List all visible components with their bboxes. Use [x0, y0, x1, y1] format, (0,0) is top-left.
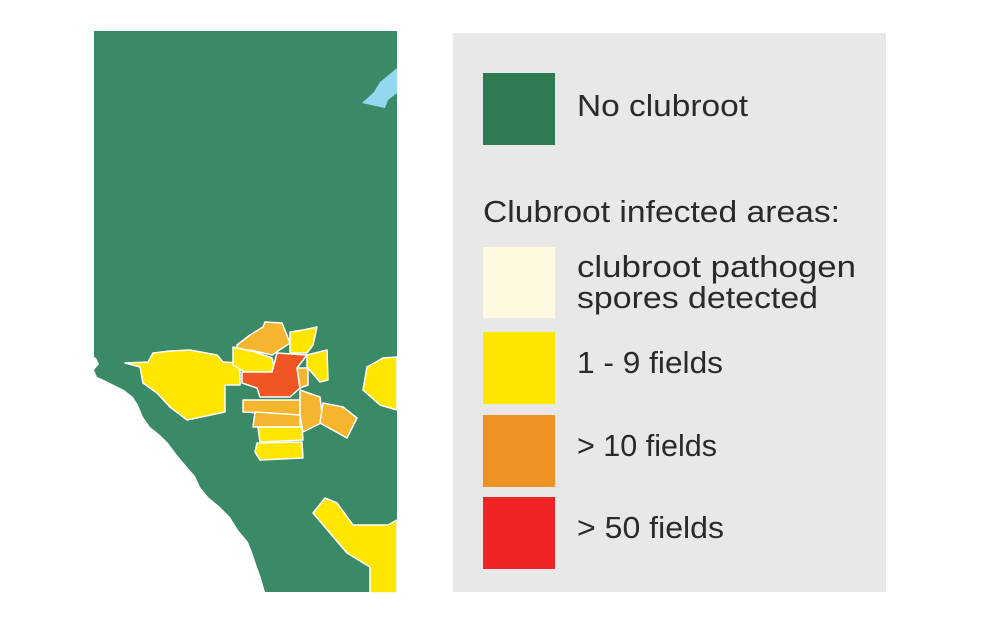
map: yellow W	[233, 347, 275, 372]
map: east yellow	[363, 357, 397, 410]
legend: >10 fields	[483, 415, 717, 487]
legend: >50 fields: > 50 fields	[577, 510, 724, 545]
legend: spores	[483, 247, 856, 318]
map: red core	[242, 353, 307, 397]
legend: spores: clubroot pathogen	[577, 249, 856, 284]
legend panel	[453, 33, 886, 592]
legend: 1-9 fields	[483, 332, 723, 404]
map: yellow N	[290, 327, 317, 353]
map: orange small	[297, 368, 308, 388]
legend: >10 fields: > 10 fields	[577, 428, 717, 463]
map: yellow row 4	[255, 442, 303, 460]
map: orange row	[243, 400, 300, 415]
legend: >50 fields	[483, 497, 724, 569]
map: yellow E	[307, 350, 328, 382]
map: south yellow	[313, 498, 397, 593]
legend: no clubroot	[483, 73, 748, 145]
map: orange NW	[237, 322, 290, 355]
map: orange tall	[300, 390, 323, 432]
map: province outline (no clubroot)	[94, 31, 397, 592]
legend: no clubroot: No clubroot	[577, 88, 748, 123]
map: orange row 2	[253, 412, 300, 427]
map	[94, 31, 397, 593]
map: lake	[362, 68, 397, 108]
map: west yellow region	[125, 350, 240, 420]
legend: 1-9 fields: 1 - 9 fields	[577, 345, 723, 380]
map: yellow row 3	[258, 427, 303, 442]
map: orange far right	[320, 403, 357, 438]
legend: spores: spores detected	[577, 280, 818, 315]
legend heading: Clubroot infected areas:	[483, 194, 840, 229]
